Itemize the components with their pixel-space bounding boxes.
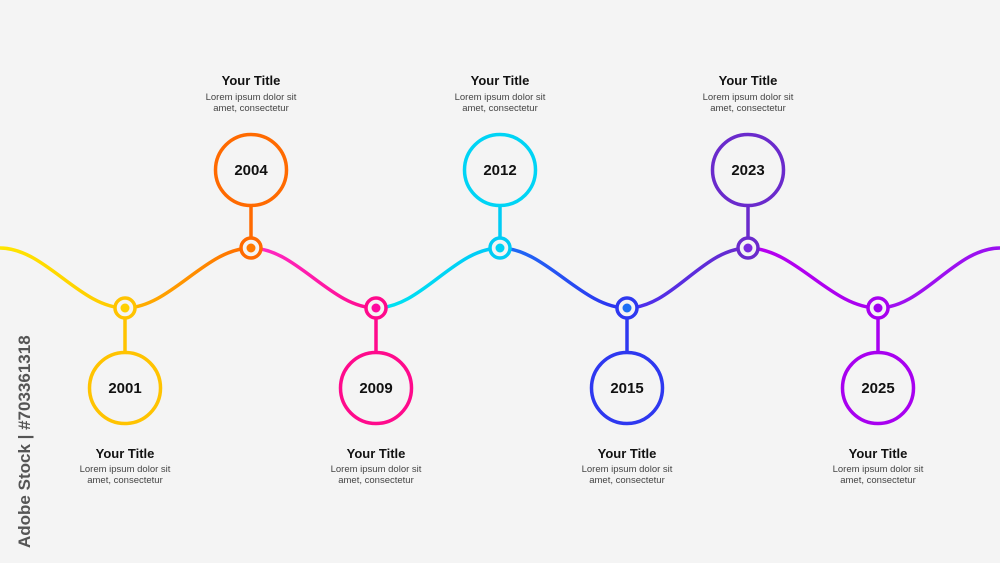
- milestone 2015: 2015: [610, 380, 644, 397]
- milestone 2009: Lorem ipsum dolor sit: [331, 464, 422, 475]
- milestone 2025: [833, 298, 924, 486]
- milestone 2001: Your Title: [96, 446, 154, 461]
- milestone 2015: [582, 298, 673, 486]
- milestone 2012: amet, consectetur: [462, 103, 538, 114]
- milestone 2009: [331, 298, 422, 486]
- milestone 2025: Your Title: [849, 446, 907, 461]
- milestone 2025: Lorem ipsum dolor sit: [833, 464, 924, 475]
- milestone 2012: Lorem ipsum dolor sit: [455, 92, 546, 103]
- milestone 2023: [703, 73, 794, 258]
- milestone 2004: Lorem ipsum dolor sit: [206, 92, 297, 103]
- milestone 2004: Your Title: [222, 73, 280, 88]
- watermark vertical text: Adobe Stock | #703361318: [15, 335, 34, 548]
- milestone 2001: Lorem ipsum dolor sit: [80, 464, 171, 475]
- milestone 2023: Your Title: [719, 73, 777, 88]
- milestone 2015: Your Title: [598, 446, 656, 461]
- milestone 2009: Your Title: [347, 446, 405, 461]
- milestone 2009: amet, consectetur: [338, 475, 414, 486]
- milestone 2023: amet, consectetur: [710, 103, 786, 114]
- milestone 2001: [80, 298, 171, 486]
- milestone 2004: [206, 73, 297, 258]
- milestone 2015: Lorem ipsum dolor sit: [582, 464, 673, 475]
- wave timeline line: [0, 248, 1000, 308]
- milestone 2004: 2004: [234, 162, 268, 179]
- milestone 2004: amet, consectetur: [213, 103, 289, 114]
- milestone 2012: Your Title: [471, 73, 529, 88]
- milestone 2001: 2001: [108, 380, 142, 397]
- milestone 2023: 2023: [731, 162, 765, 179]
- milestone 2012: 2012: [483, 162, 517, 179]
- milestone 2015: amet, consectetur: [589, 475, 665, 486]
- milestone 2009: 2009: [359, 380, 393, 397]
- milestone 2023: Lorem ipsum dolor sit: [703, 92, 794, 103]
- milestone 2012: [455, 73, 546, 258]
- milestone 2001: amet, consectetur: [87, 475, 163, 486]
- milestone 2025: 2025: [861, 380, 895, 397]
- milestone 2025: amet, consectetur: [840, 475, 916, 486]
